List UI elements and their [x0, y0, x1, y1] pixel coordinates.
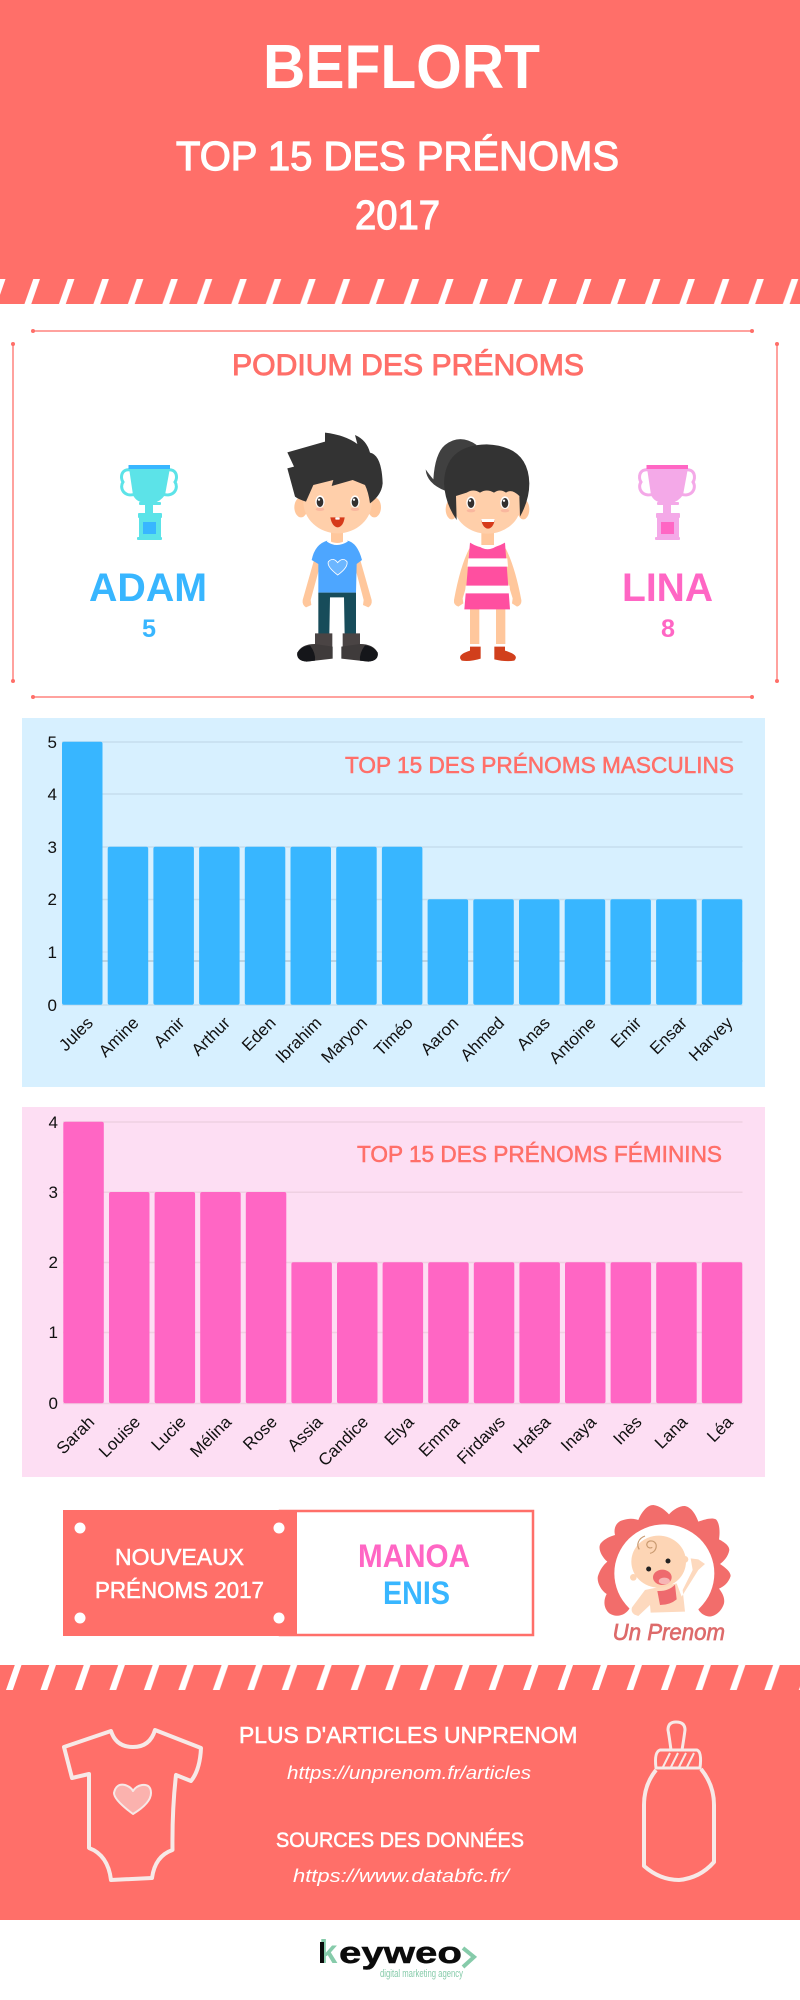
boy name: ADAM	[89, 566, 207, 610]
podium frame	[11, 329, 779, 699]
keyweo logo: digital marketing agency	[380, 1968, 463, 1980]
illustration: girl	[426, 439, 529, 661]
x axis labels: Candice	[314, 1412, 372, 1470]
y axis labels: 4	[48, 785, 57, 804]
y axis labels	[48, 733, 57, 1015]
sources link: https://www.databfc.fr/	[293, 1866, 511, 1886]
plate text line 2: PRÉNOMS 2017	[95, 1577, 264, 1603]
icon: pink trophy	[640, 465, 694, 540]
y axis labels	[49, 1113, 58, 1413]
y axis labels: 3	[49, 1183, 58, 1202]
y axis labels: 3	[48, 838, 57, 857]
panel: boys chart	[22, 718, 765, 1087]
x axis labels: Lucie	[147, 1412, 190, 1455]
new boy name: ENIS	[383, 1575, 450, 1611]
plate text line 1: NOUVEAUX	[115, 1544, 244, 1570]
podium heading: PODIUM DES PRÉNOMS	[232, 349, 584, 382]
boys chart heading: TOP 15 DES PRÉNOMS MASCULINS	[345, 752, 734, 778]
x axis labels: Jules	[55, 1013, 97, 1055]
x axis labels	[53, 1412, 737, 1470]
x axis labels: Amine	[95, 1013, 143, 1061]
x axis labels: Inès	[609, 1412, 646, 1449]
sources heading: SOURCES DES DONNÉES	[276, 1829, 524, 1852]
x axis labels	[55, 1013, 737, 1068]
x axis labels: Mélina	[186, 1412, 236, 1461]
new girl name: MANOA	[358, 1538, 470, 1574]
x axis labels: Sarah	[53, 1412, 98, 1458]
x axis labels: Inaya	[557, 1412, 600, 1455]
icon: baby bottle	[644, 1722, 714, 1880]
keyweo logo: eyweo	[339, 1935, 462, 1970]
label plate	[63, 1510, 297, 1636]
header banner	[0, 0, 800, 304]
x axis labels: Amir	[150, 1013, 188, 1052]
icon: Un Prenom logo	[598, 1505, 731, 1645]
bars	[62, 742, 742, 1005]
articles heading: PLUS D'ARTICLES UNPRENOM	[239, 1722, 578, 1748]
x axis labels: Arthur	[188, 1013, 234, 1060]
icon: blue trophy	[122, 465, 176, 540]
girl name: LINA	[622, 566, 713, 610]
keyweo logo: k	[319, 1933, 338, 1970]
x axis labels: Ahmed	[457, 1013, 508, 1065]
subtitle: TOP 15 DES PRÉNOMS	[176, 133, 619, 179]
x axis labels: Assia	[284, 1412, 327, 1455]
x axis labels: Firdaws	[453, 1412, 509, 1468]
plate rivets	[74, 1522, 284, 1624]
logo wordmark: Un Prenom	[613, 1619, 725, 1645]
gridlines	[62, 742, 742, 1005]
x axis labels: Harvey	[685, 1013, 737, 1065]
title: city: BEFLORT	[263, 33, 540, 102]
x axis labels: Aaron	[417, 1013, 462, 1059]
x axis labels: Elya	[381, 1412, 418, 1449]
x axis labels: Ensar	[646, 1013, 691, 1058]
keyweo logo	[319, 1933, 474, 1980]
y axis labels: 4	[49, 1113, 58, 1132]
panel: new names	[63, 1510, 533, 1636]
x axis labels: Léa	[703, 1412, 737, 1446]
names box	[280, 1511, 533, 1635]
year: 2017	[355, 192, 440, 238]
y axis labels: 2	[48, 890, 57, 909]
x axis labels: Rose	[239, 1412, 281, 1454]
panel: podium	[11, 329, 779, 699]
bars	[63, 1122, 742, 1403]
boy count: 5	[142, 615, 156, 643]
y axis labels: 1	[48, 943, 57, 962]
x axis labels: Emma	[415, 1412, 464, 1461]
y axis labels: 0	[48, 996, 57, 1015]
articles link: https://unprenom.fr/articles	[287, 1763, 531, 1783]
x axis labels: Emir	[607, 1013, 645, 1052]
x axis labels: Anas	[513, 1013, 554, 1054]
x axis labels: Antoine	[545, 1013, 600, 1068]
x axis labels: Louise	[95, 1412, 144, 1461]
y axis labels: 5	[48, 733, 57, 752]
x axis labels: Lana	[651, 1412, 692, 1453]
girl count: 8	[661, 615, 675, 643]
footer band	[0, 1665, 800, 1920]
panel: girls chart	[22, 1107, 765, 1477]
y axis labels: 2	[49, 1253, 58, 1272]
illustration: boy	[287, 433, 383, 662]
x axis labels: Maryon	[318, 1013, 371, 1067]
x axis labels: Eden	[238, 1013, 280, 1055]
girls chart heading: TOP 15 DES PRÉNOMS FÉMININS	[357, 1141, 722, 1167]
y axis labels: 1	[49, 1323, 58, 1342]
x axis labels: Hafsa	[510, 1412, 555, 1457]
icon: bodysuit	[64, 1730, 201, 1880]
y axis labels: 0	[49, 1394, 58, 1413]
gridlines	[63, 1122, 742, 1404]
x axis labels: Timéo	[370, 1013, 417, 1060]
x axis labels: Ibrahim	[272, 1013, 325, 1067]
